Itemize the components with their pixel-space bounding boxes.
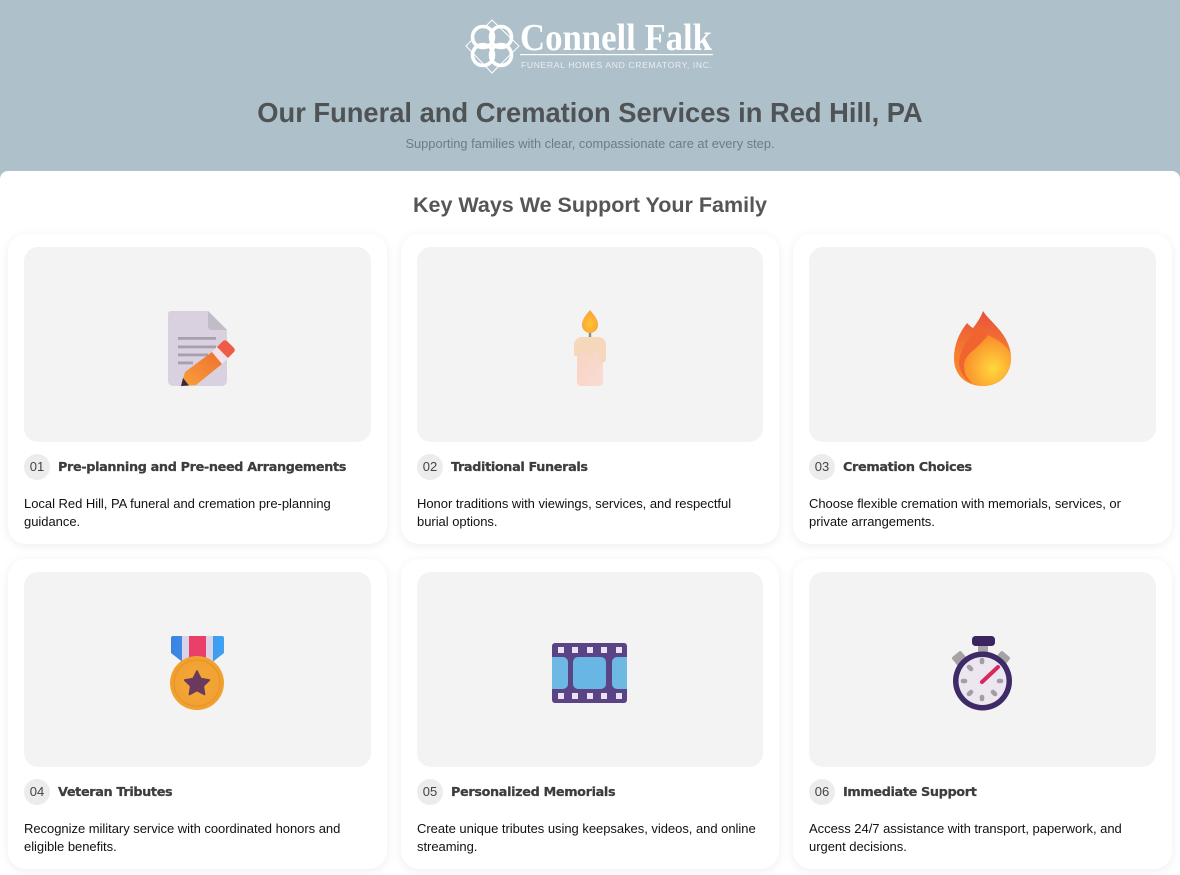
card heading: Pre-planning and Pre-need Arrangements — [58, 460, 346, 475]
header band — [0, 0, 1180, 180]
number badge — [809, 454, 835, 480]
card 01: pre-planning — [8, 234, 387, 544]
card description — [809, 496, 1121, 529]
number badge — [24, 454, 50, 480]
number badge — [417, 779, 443, 805]
card heading: Immediate Support — [843, 785, 976, 800]
subtitle: Supporting families with clear, compassionate care at every step. — [405, 136, 775, 151]
number badge: 06 — [815, 784, 829, 799]
number badge: 04 — [30, 784, 44, 799]
card description — [809, 821, 1122, 854]
card description: Choose flexible cremation with memorials, services, or — [809, 496, 1121, 511]
number badge: 05 — [423, 784, 437, 799]
image panel with medal icon — [24, 572, 371, 767]
card description: Create unique tributes using keepsakes, videos, and online — [417, 821, 756, 836]
card 02: traditional funerals — [401, 234, 779, 544]
card description: guidance. — [24, 514, 80, 529]
number badge: 02 — [423, 459, 437, 474]
number badge — [809, 779, 835, 805]
card heading: Personalized Memorials — [451, 785, 615, 800]
card 03: cremation choices — [793, 234, 1172, 544]
number badge — [417, 454, 443, 480]
image panel with flame icon — [809, 247, 1156, 442]
logo knot mark — [466, 20, 519, 73]
card description — [417, 821, 756, 854]
main title: Our Funeral and Cremation Services in Red Hill, PA — [257, 97, 923, 128]
section heading: Key Ways We Support Your Family — [413, 193, 767, 217]
card description: Local Red Hill, PA funeral and cremation pre-planning — [24, 496, 331, 511]
card description: burial options. — [417, 514, 498, 529]
card description: Honor traditions with viewings, services, and respectful — [417, 496, 731, 511]
card description — [24, 496, 331, 529]
card description — [24, 821, 340, 854]
card 04: veteran tributes — [8, 559, 387, 869]
card description: Access 24/7 assistance with transport, paperwork, and — [809, 821, 1122, 836]
image panel with candle icon — [417, 247, 763, 442]
card heading: Traditional Funerals — [451, 460, 588, 475]
card heading: Cremation Choices — [843, 460, 972, 475]
card description — [417, 496, 731, 529]
number badge — [24, 779, 50, 805]
card description: streaming. — [417, 839, 477, 854]
image panel with stopwatch icon — [809, 572, 1156, 767]
number badge: 01 — [30, 459, 44, 474]
card 05: personalized memorials — [401, 559, 779, 869]
image panel with film strip icon — [417, 572, 763, 767]
card 06: immediate support — [793, 559, 1172, 869]
card description: Recognize military service with coordinated honors and — [24, 821, 340, 836]
card heading: Veteran Tributes — [58, 785, 172, 800]
card description: eligible benefits. — [24, 839, 117, 854]
logo tagline: FUNERAL HOMES AND CREMATORY, INC. — [521, 60, 712, 70]
number badge: 03 — [815, 459, 829, 474]
logo — [466, 17, 713, 74]
card description: private arrangements. — [809, 514, 935, 529]
image panel with document icon — [24, 247, 371, 442]
card description: urgent decisions. — [809, 839, 907, 854]
